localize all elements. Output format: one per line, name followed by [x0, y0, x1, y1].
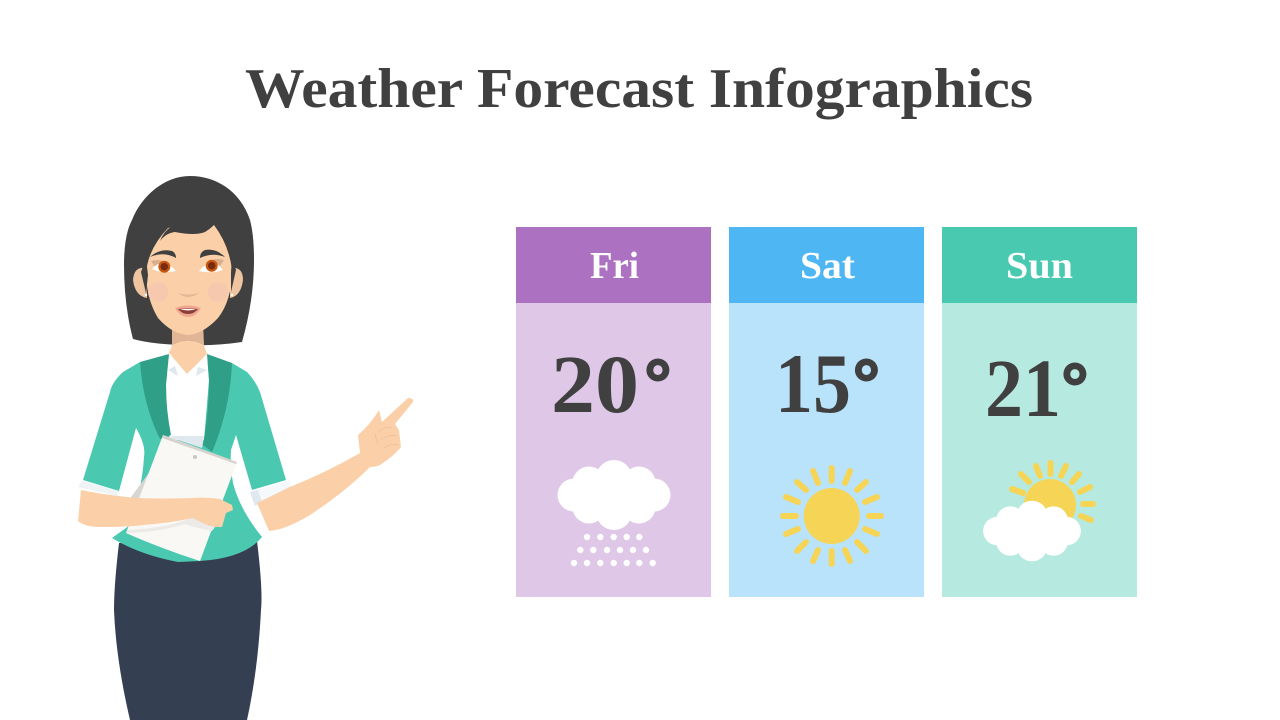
hand knuckles [375, 428, 399, 448]
card body [516, 227, 711, 597]
icon: rain cloud [558, 460, 670, 566]
day header [516, 227, 711, 303]
icon: sun behind cloud [983, 463, 1093, 561]
nose [178, 293, 199, 297]
neck [169, 340, 207, 374]
day label: Fri [590, 245, 639, 287]
collar shade [168, 366, 207, 376]
shirt hem [170, 436, 204, 448]
jacket [83, 362, 286, 562]
illustration: presenter woman [78, 176, 413, 720]
left eye [151, 260, 176, 273]
left cuff [78, 481, 119, 496]
eyebrows [150, 250, 225, 258]
day label: Sat [800, 245, 855, 287]
left lapel [140, 354, 171, 439]
panel: Friday [516, 227, 711, 597]
right arm pointing [257, 398, 413, 531]
card body [729, 227, 924, 597]
icon: sun [783, 468, 881, 564]
clipboard [125, 435, 237, 561]
temperature: 20 [551, 338, 639, 430]
temperature: ° [645, 346, 671, 419]
temperature: ° [853, 346, 880, 419]
mouth [175, 306, 201, 317]
title: Weather Forecast Infographics [245, 58, 1033, 120]
day header [942, 227, 1137, 303]
right lapel [203, 354, 232, 452]
hair side strands [141, 258, 236, 293]
cheeks [148, 282, 168, 302]
card body [942, 227, 1137, 597]
panel: Sunday [942, 227, 1137, 597]
panel: Saturday [729, 227, 924, 597]
temperature: ° [1062, 350, 1088, 423]
earrings [145, 294, 147, 296]
temperature [551, 338, 671, 430]
right cuff [250, 480, 291, 506]
hair [124, 176, 254, 345]
left arm holding clipboard [78, 490, 233, 527]
ears [133, 268, 243, 298]
neck shadow [172, 322, 204, 345]
skirt [114, 541, 262, 720]
right eye [199, 259, 224, 272]
temperature: 21 [985, 342, 1061, 434]
day header [729, 227, 924, 303]
shirt [166, 353, 209, 440]
face [146, 225, 232, 335]
temperature: 15 [775, 337, 851, 431]
day label: Sun [1006, 245, 1073, 287]
hair fringe [160, 215, 214, 241]
